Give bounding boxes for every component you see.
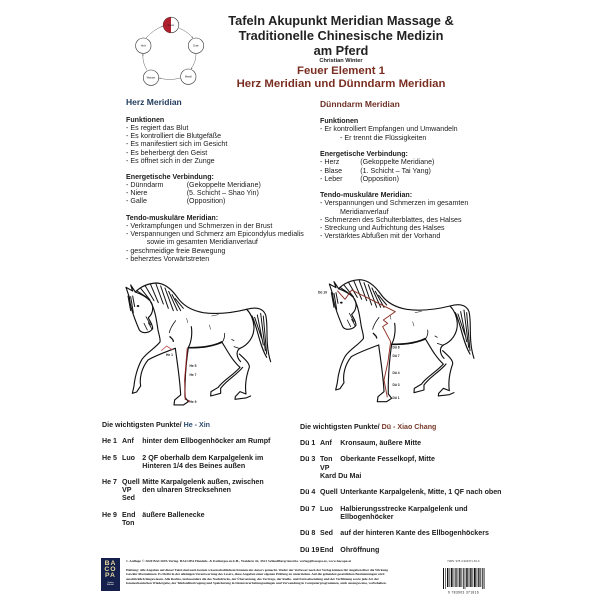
point labels Dü: Dü 7	[392, 354, 400, 358]
point He 9: äußere Ballenecke	[142, 511, 205, 519]
point Dü 3	[300, 455, 435, 480]
panel: Dünndarm Meridian text	[320, 99, 468, 240]
point Dü 7: Luo	[320, 505, 333, 513]
Funktionen list: - Er trennt die Flüssigkeiten	[340, 134, 426, 142]
point Dü 3: Dü 3	[300, 455, 315, 463]
Funktionen list	[126, 116, 228, 165]
Tendo-muskuläre Meridian list: - Verspannungen und Schmerzen im gesamten	[320, 199, 468, 207]
element: Feuer: Feuer	[168, 23, 175, 27]
Energetische Verbindung list: Energetische Verbindung:	[126, 173, 214, 181]
Tendo-muskuläre Meridian list: - Verkrampfungen und Schmerzen in der Brust	[126, 222, 272, 230]
Energetische Verbindung list: Energetische Verbindung:	[320, 150, 408, 158]
point labels Dü: Dü 19	[318, 290, 327, 294]
title	[228, 12, 454, 58]
chart: Herz meridian horse	[126, 283, 271, 405]
point Dü 4: Unterkante Karpalgelenk, Mitte, 1 QF nach oben	[340, 488, 502, 496]
point He 7: VP	[122, 486, 131, 494]
point Dü 1: Kronsaum, äußere Mitte	[340, 439, 421, 447]
point He 5: Hinteren 1/4 des Beines außen	[142, 462, 245, 470]
point He 9: Ton	[122, 519, 134, 527]
Energetische Verbindung list: (Gekoppelte Meridiane)	[360, 158, 434, 166]
Tendo-muskuläre Meridian list: - geschmeidige freie Bewegung	[126, 247, 225, 255]
Tendo-muskuläre Meridian list: Meridianverlauf	[340, 208, 388, 216]
point labels He: He 1	[166, 353, 173, 357]
Funktionen list: Funktionen	[320, 117, 358, 125]
Energetische Verbindung list: - Herz	[320, 158, 339, 166]
point He 7: Sed	[122, 494, 135, 502]
point He 7	[102, 478, 264, 502]
point Dü 8: auf der hinteren Kante des Ellbogenhöckers	[340, 529, 489, 537]
Herz meridian line	[161, 346, 190, 401]
Energetische Verbindung list: - Galle	[126, 197, 147, 205]
panel: Dünndarm points table	[300, 423, 502, 554]
Energetische Verbindung list: (1. Schicht – Tai Yang)	[360, 167, 431, 175]
Energetische Verbindung list: - Dünndarm	[126, 181, 163, 189]
point He 1: He 1	[102, 437, 117, 445]
Energetische Verbindung list: (Opposition)	[187, 197, 225, 205]
disclaimer text: Gewähr übernehmen. Es bleibt in der alleinigen Verantwortung des Lesers, diese Angaben einer eigenen Prüfung zu unterziehen. Auf die geltenden gesetzlichen Bestimmungen wird	[126, 572, 384, 576]
Funktionen list: - Es kontrolliert die Blutgefäße	[126, 132, 221, 140]
point He 9	[102, 511, 205, 527]
heading: Herz Meridian: Herz Meridian	[126, 97, 182, 107]
Tendo-muskuläre Meridian list: - beherztes Vorwärtstreten	[126, 255, 209, 263]
point Dü 3: VP	[320, 464, 329, 472]
Energetische Verbindung list: (Gekoppelte Meridiane)	[187, 181, 261, 189]
Tendo-muskuläre Meridian list	[320, 191, 468, 240]
Tendo-muskuläre Meridian list: - Verspannungen und Schmerz am Epicondylus medialis	[126, 230, 304, 238]
point Dü 19	[300, 546, 379, 554]
point He 7: Mitte Karpalgelenk außen, zwischen	[142, 478, 264, 486]
point labels He: He 5	[190, 364, 197, 368]
point labels Dü: Dü 1	[392, 396, 400, 400]
element: Metall: Metall	[185, 75, 192, 79]
Tendo-muskuläre Meridian list: Tendo-muskuläre Meridian:	[320, 191, 412, 199]
point He 9: End	[122, 511, 135, 519]
Funktionen list: - Es beherbergt den Geist	[126, 149, 207, 157]
Energetische Verbindung list	[126, 173, 261, 205]
point labels Dü: Dü 4	[392, 371, 400, 375]
point He 1: Anf	[122, 437, 134, 445]
point Dü 1: Dü 1	[300, 439, 315, 447]
title: Traditionelle Chinesische Medizin	[239, 28, 443, 42]
point Dü 19: Dü 19	[300, 546, 319, 554]
logo: BACOPA: CO	[104, 566, 117, 573]
points heading: Die wichtigsten Punkte/ He - Xin	[102, 421, 210, 429]
Energetische Verbindung list: (5. Schicht – Shao Yin)	[187, 189, 259, 197]
panel: Herz points table	[102, 421, 270, 527]
point Dü 1: Anf	[320, 439, 332, 447]
point He 7: den ulnaren Strecksehnen	[142, 486, 231, 494]
barcode: 9 783903 371816	[448, 590, 479, 594]
point He 5: 2 QF oberhalb dem Karpalgelenk im	[142, 454, 263, 462]
Dünndarm meridian line	[337, 290, 395, 397]
barcode	[443, 559, 484, 594]
Energetische Verbindung list: - Leber	[320, 175, 342, 183]
logo: BACOPA: BA	[105, 560, 116, 566]
logo: BACOPA: Verlag	[107, 582, 114, 584]
Tendo-muskuläre Meridian list: - Streckung und Aufrichtung des Halses	[320, 224, 445, 232]
point Dü 7	[300, 505, 468, 521]
point Dü 7: Ellbogenhöcker	[340, 513, 394, 521]
Funktionen list: - Es manifestiert sich im Gesicht	[126, 140, 227, 148]
Energetische Verbindung list: - Blase	[320, 167, 342, 175]
point He 5: He 5	[102, 454, 117, 462]
imprint line: 1. Auflage © 2020 BACOPA Verlag. BACOPA Handels- & Kulturges.m.b.H., Waidern 42, 4521 Schiedlberg/Austria. verlag@bacopa.at, www.bacopa.at	[126, 559, 351, 563]
point Dü 7: Halbierungsstrecke Karpalgelenk und	[340, 505, 468, 513]
point labels He: He 9	[190, 400, 197, 404]
Tendo-muskuläre Meridian list: - Verstärktes Abfußen mit der Vorhand	[320, 232, 440, 240]
point Dü 19: End	[320, 546, 333, 554]
point labels He	[166, 353, 197, 404]
element: Wasser: Wasser	[147, 76, 155, 80]
Energetische Verbindung list: - Niere	[126, 189, 147, 197]
point Dü 8: Dü 8	[300, 529, 315, 537]
disclaimer text	[126, 568, 388, 585]
point He 5: Luo	[122, 454, 135, 462]
point He 9: He 9	[102, 511, 117, 519]
disclaimer text: fotomechanischen Wiedergabe, der Telefonübertragung und Speicherung in Datenverarbeitungsanlagen und Verwendung in Computerprogrammen, auch auszugsweise, vorbehalten.	[126, 581, 386, 585]
logo: BACOPA: PA	[105, 572, 116, 579]
point Dü 4: Dü 4	[300, 488, 315, 496]
point labels Dü: Dü 8	[392, 346, 400, 350]
logo: BACOPA: Edition	[107, 584, 114, 586]
point labels He: He 7	[190, 373, 197, 377]
five element wheel diagram	[135, 16, 204, 86]
Funktionen list	[320, 117, 458, 142]
barcode: ISBN: 978-3-903371-81-6	[447, 559, 480, 563]
point Dü 3: Oberkante Fesselkopf, Mitte	[340, 455, 435, 463]
Funktionen list: - Er kontrolliert Empfangen und Umwandeln	[320, 125, 458, 133]
Tendo-muskuläre Meridian list: Tendo-muskuläre Meridian:	[126, 214, 218, 222]
Funktionen list: Funktionen	[126, 116, 164, 124]
element: Erde: Erde	[193, 44, 199, 48]
title: Tafeln Akupunkt Meridian Massage &	[228, 12, 454, 28]
disclaimer text: Haftung: Alle Angaben auf dieser Tafel sind nach bestem wissenschaftlichem Können des Autors gemacht. Weder der Verfasser noch der Verlag können für Angaben über die Wirkung	[126, 568, 388, 572]
chart: Dünndarm meridian horse	[318, 280, 474, 402]
title: am Pferd	[314, 42, 368, 58]
Energetische Verbindung list: (Opposition)	[360, 175, 399, 183]
point Dü 7: Dü 7	[300, 505, 315, 513]
element: Holz: Holz	[141, 44, 147, 48]
Energetische Verbindung list	[320, 150, 434, 183]
point Dü 3: Kard Du Mai	[320, 472, 361, 480]
Tendo-muskuläre Meridian list	[126, 214, 304, 263]
subtitle: Feuer Element 1	[297, 64, 385, 76]
heading: Dünndarm Meridian: Dünndarm Meridian	[320, 99, 400, 109]
point He 1: hinter dem Ellbogenhöcker am Rumpf	[142, 437, 270, 445]
point Dü 19: Ohröffnung	[340, 546, 379, 554]
author: Christian Winter	[319, 58, 363, 64]
panel: Herz Meridian text	[126, 97, 304, 263]
point Dü 3: Ton	[320, 455, 332, 463]
subtitle	[237, 64, 445, 90]
logo: BACOPA	[101, 558, 120, 591]
Funktionen list: - Es regiert das Blut	[126, 124, 188, 132]
disclaimer text: ausdrücklich hingewiesen. Alle Rechte, insbesondere die des Nachdrucks, der Übersetzung, des Vortrags, der Radio- und Fernsehsendung und der Verfilmung sowie jede Art der	[126, 577, 379, 581]
point He 7: Quell	[122, 478, 140, 486]
point He 5	[102, 454, 263, 470]
Tendo-muskuläre Meridian list: - Schmerzen des Schulterblattes, des Halses	[320, 216, 462, 224]
Tendo-muskuläre Meridian list: sowie im gesamten Meridianverlauf	[147, 238, 258, 246]
points heading: Die wichtigsten Punkte/ Dü - Xiao Chang	[300, 423, 436, 431]
point Dü 8: Sed	[320, 529, 333, 537]
point labels Dü: Dü 3	[392, 383, 400, 387]
subtitle: Herz Meridian und Dünndarm Meridian	[237, 78, 445, 90]
point labels Dü	[318, 290, 400, 400]
point Dü 4: Quell	[320, 488, 338, 496]
point He 7: He 7	[102, 478, 117, 486]
point Dü 1	[300, 439, 421, 447]
Funktionen list: - Es öffnet sich in der Zunge	[126, 157, 215, 165]
